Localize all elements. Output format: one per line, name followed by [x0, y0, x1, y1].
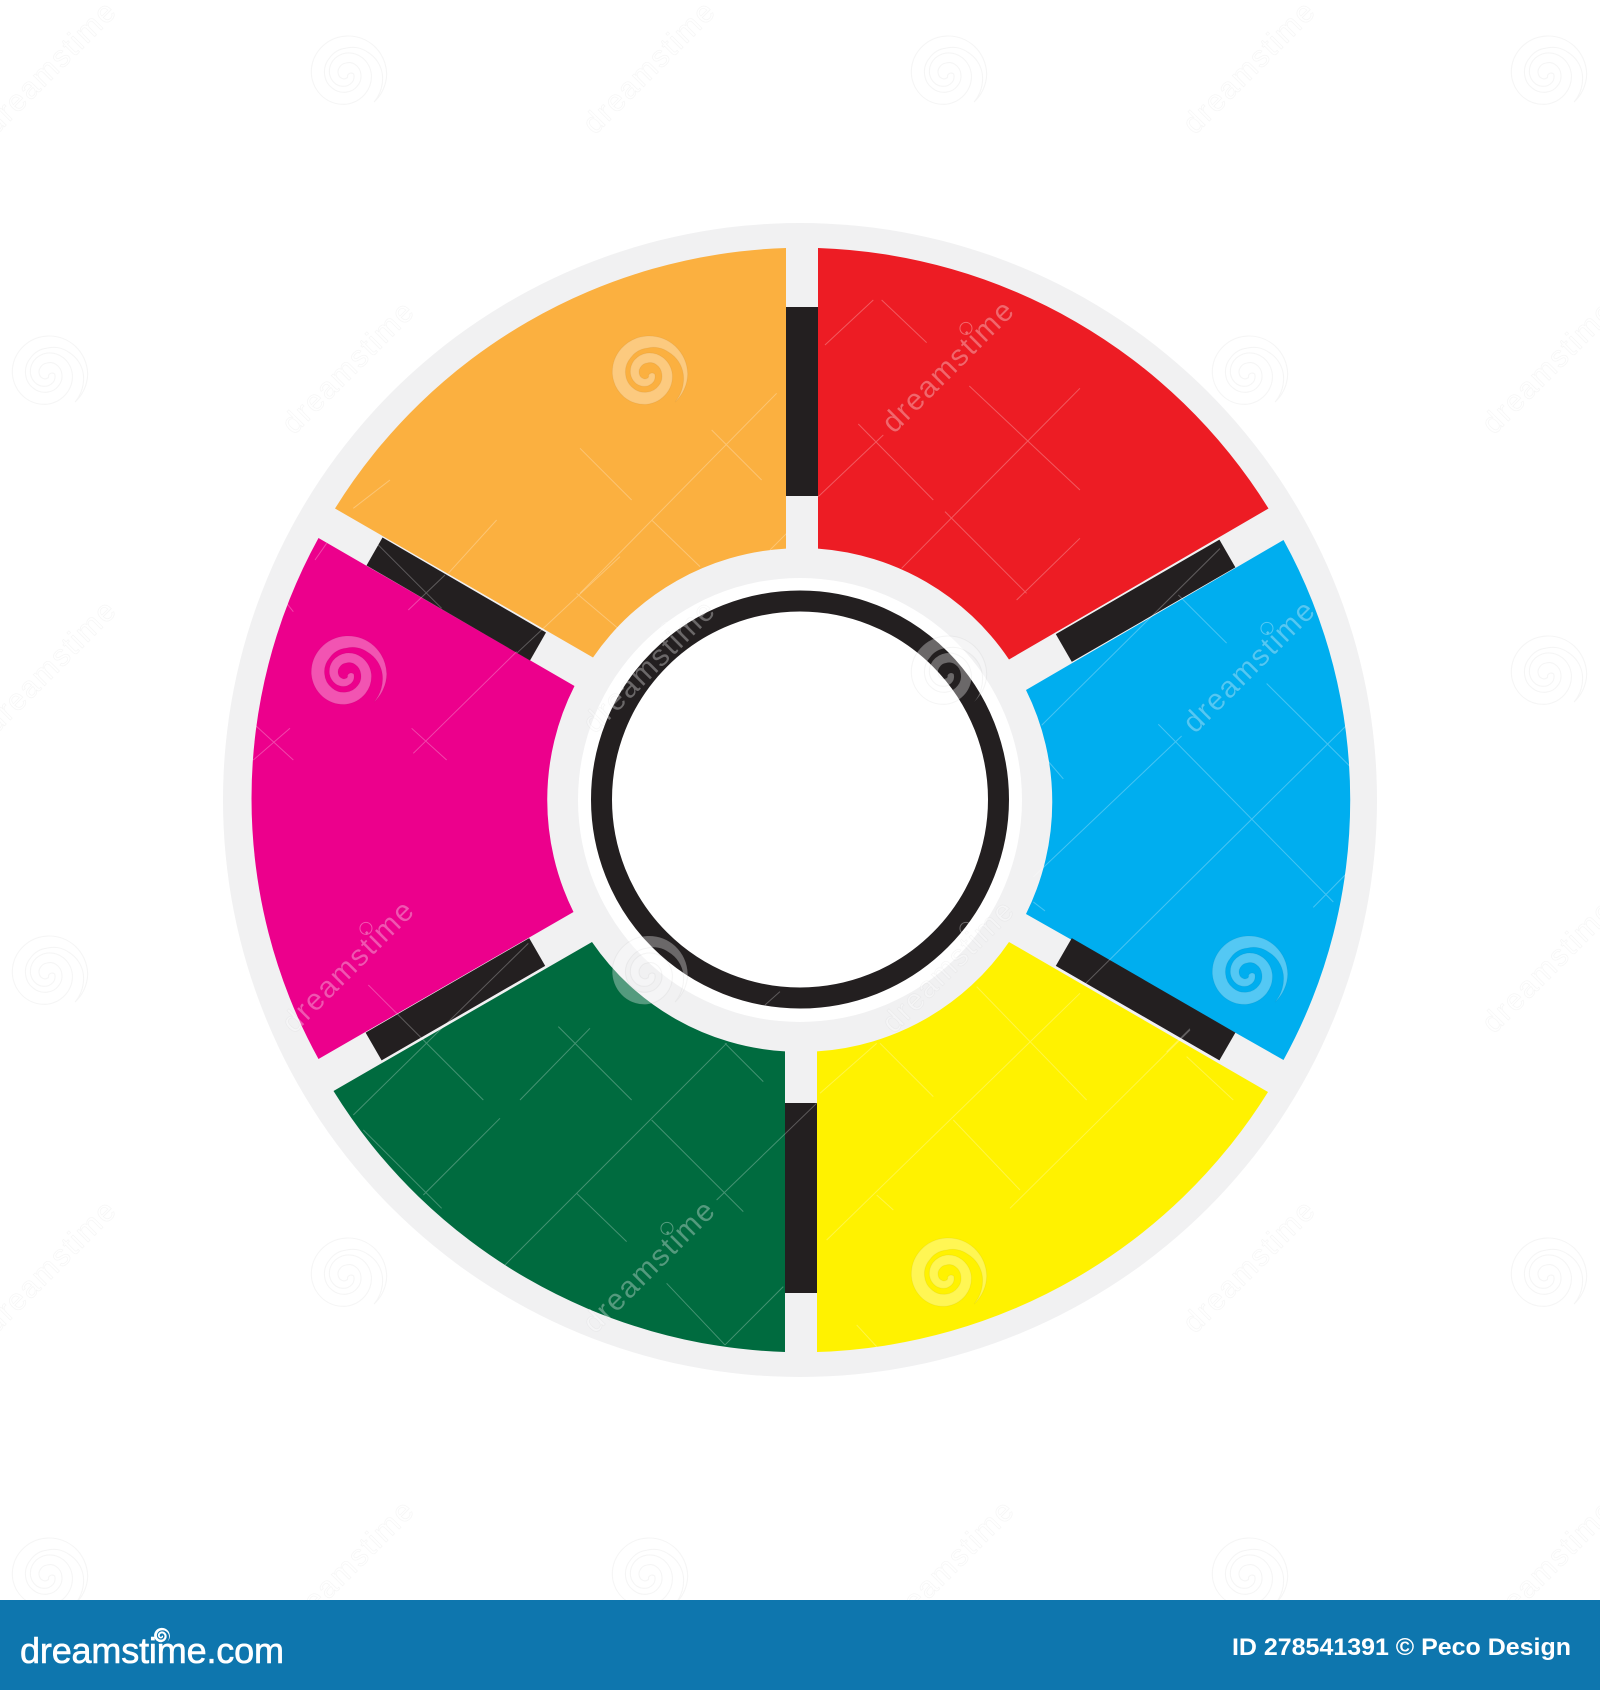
segment: orange [335, 248, 786, 658]
watermark text: dreamstime [275, 894, 420, 1039]
watermark text: dreamstime [875, 294, 1020, 439]
black hub ring [602, 601, 998, 998]
segment: blue [1026, 540, 1350, 1060]
watermark text: dreamstime [576, 594, 721, 739]
spoke: lower right [1056, 938, 1235, 1060]
spoke: upper right [1056, 540, 1235, 662]
footer image credit: ID 278541391 © Peco Design [1232, 1634, 1571, 1661]
white ring around hub [578, 578, 1022, 1022]
colour wheel [223, 223, 1377, 1377]
footer logo text: dreamstime.com [20, 1630, 284, 1671]
spoke: lower left [366, 938, 545, 1060]
watermark text: dreamstime [275, 295, 420, 440]
footer bar [0, 1600, 1600, 1690]
outer grey disc [223, 223, 1377, 1377]
watermark text: dreamstime [275, 1494, 420, 1639]
watermark text: dreamstime [576, 1194, 721, 1339]
segment: magenta [252, 538, 574, 1059]
footer logo swirl icon [154, 1628, 170, 1642]
spoke: top [786, 307, 818, 496]
footer background [0, 1600, 1600, 1690]
spoke: upper left [366, 538, 546, 660]
watermark text: dreamstime [875, 1494, 1020, 1639]
segment: red [818, 248, 1268, 660]
watermark text: dreamstime [1176, 594, 1321, 739]
watermark text: dreamstime [875, 894, 1020, 1039]
spoke: bottom [785, 1103, 817, 1293]
watermark text: dreamstime [1176, 1194, 1321, 1339]
segment: green [334, 942, 785, 1352]
segment: yellow [817, 942, 1268, 1352]
